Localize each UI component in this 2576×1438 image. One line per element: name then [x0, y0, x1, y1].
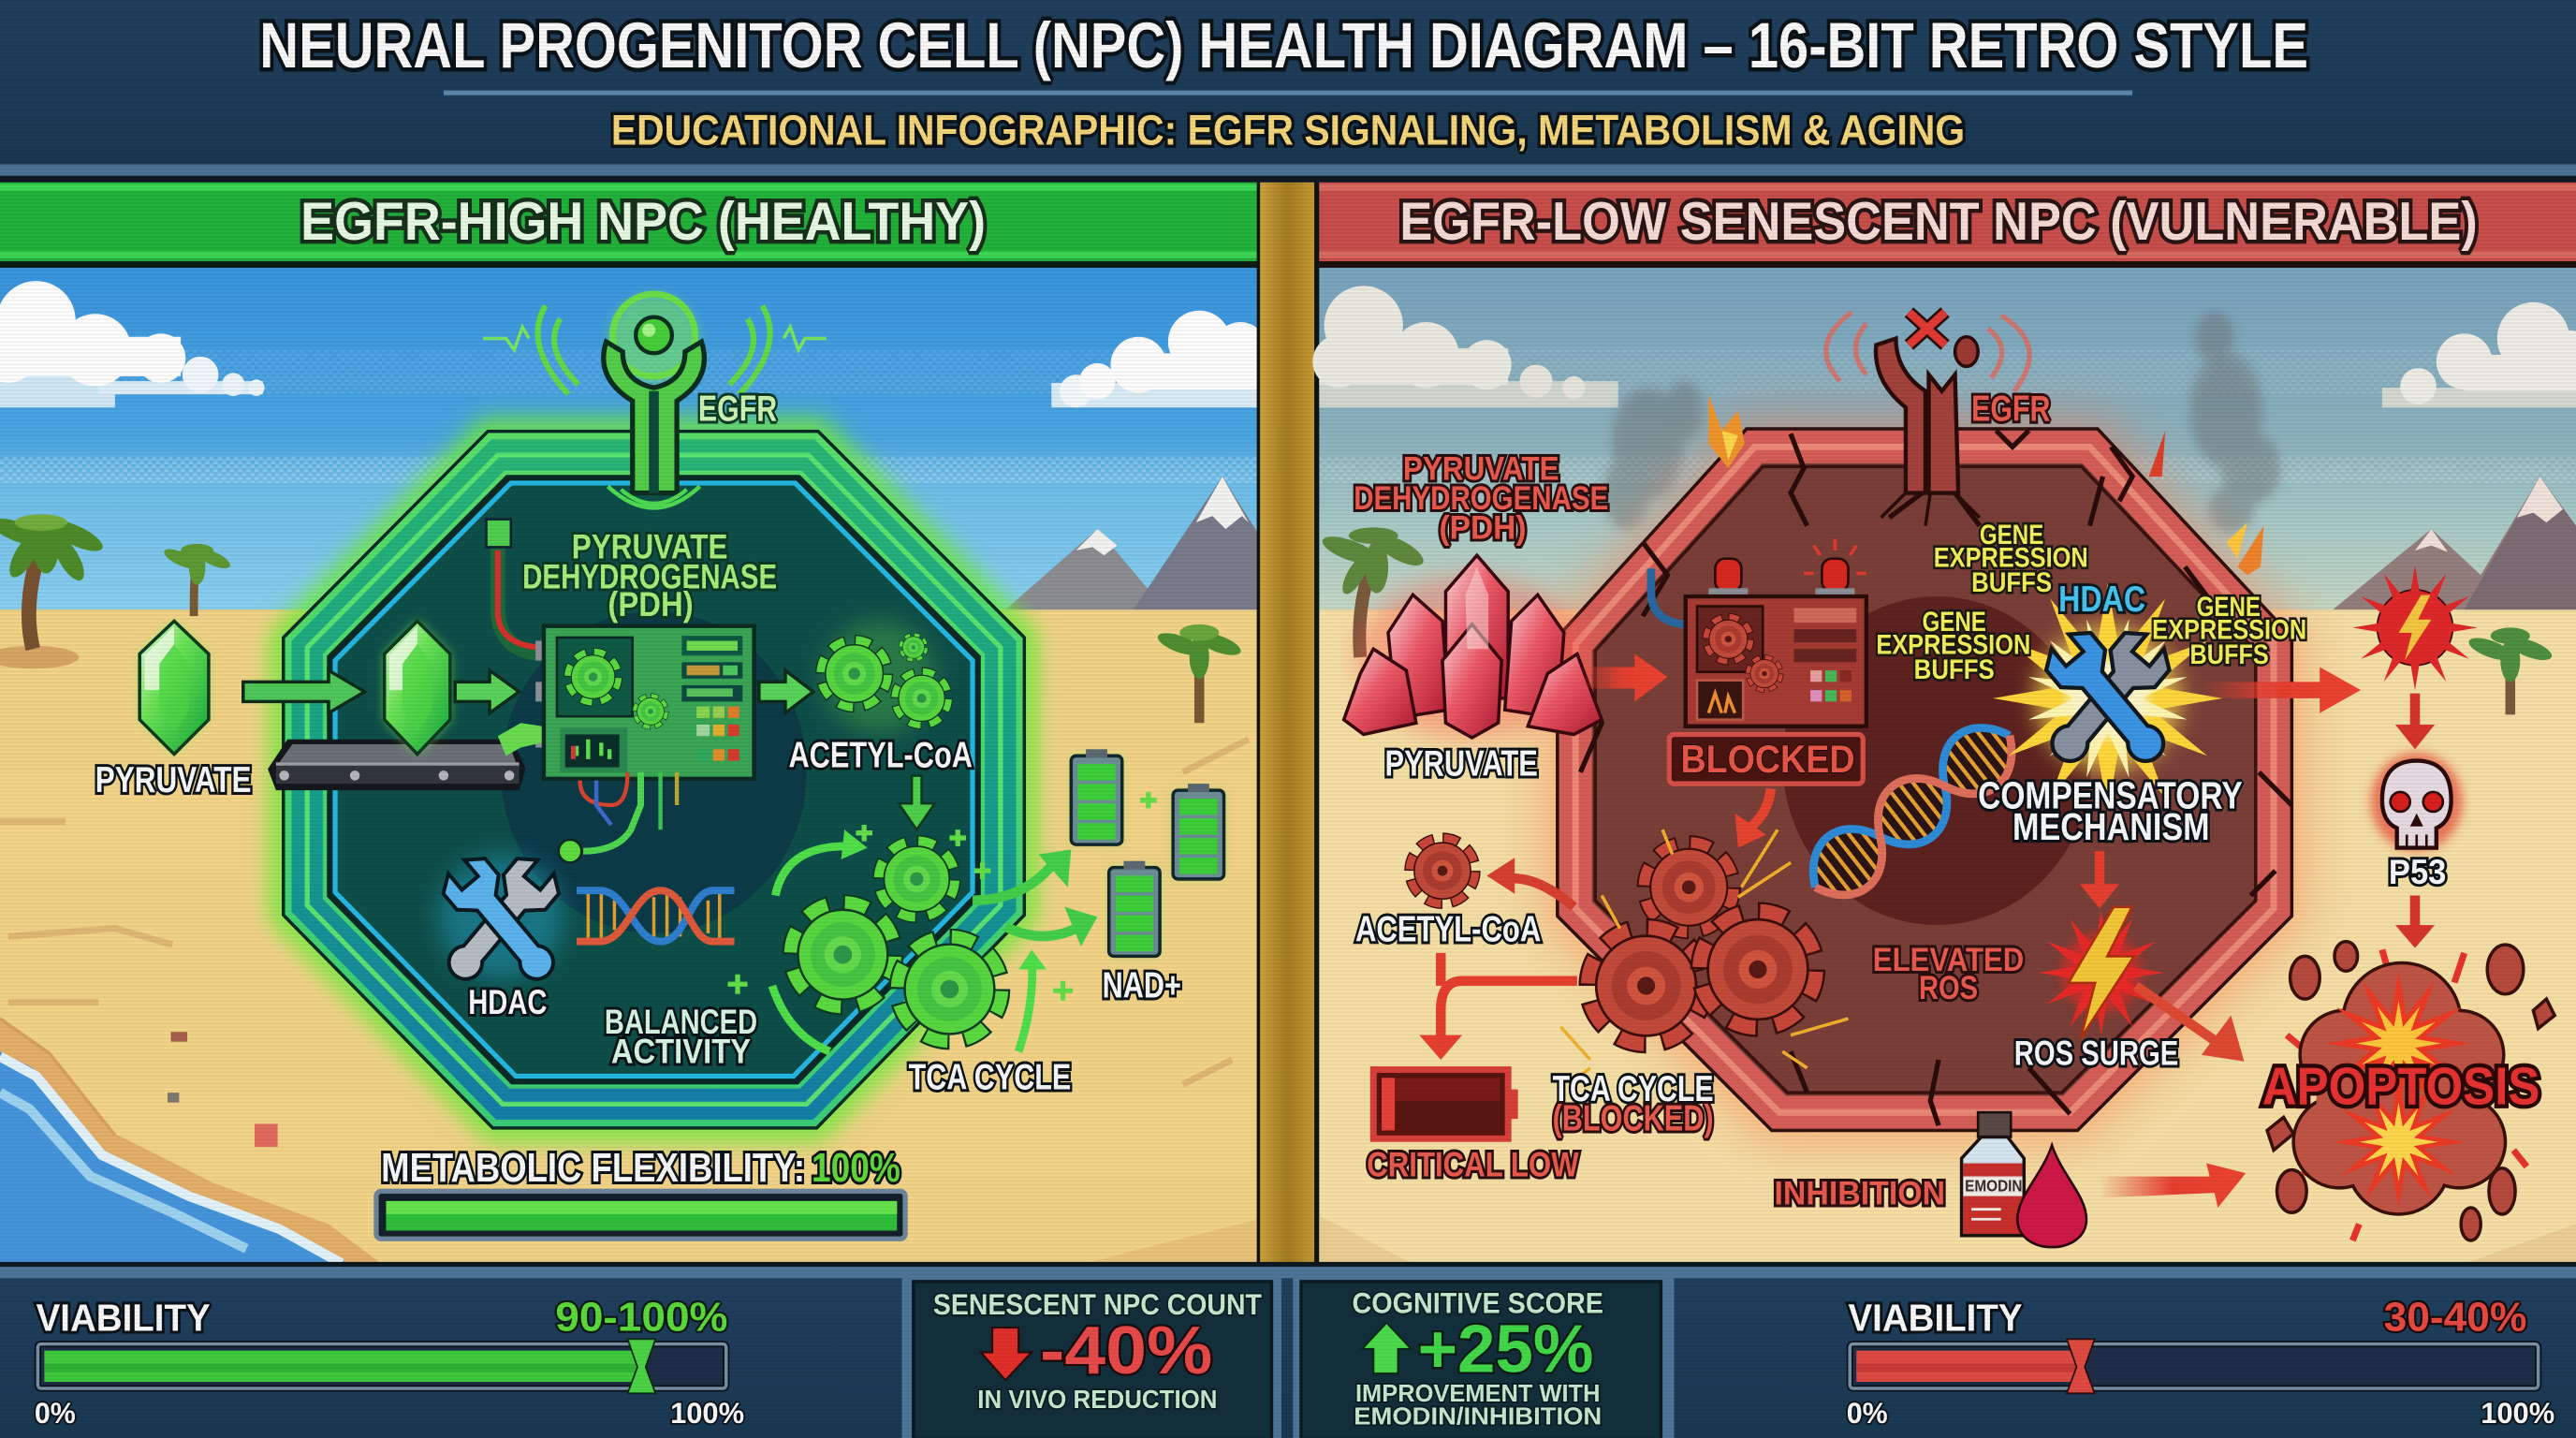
icon: TCA cycle gears	[728, 792, 1157, 1051]
header bar	[0, 0, 2576, 183]
clouds	[0, 281, 1266, 407]
viability gauge healthy	[35, 1295, 744, 1430]
icon: broken TCA gears	[1560, 829, 1848, 1084]
arrow into PDH	[455, 670, 520, 713]
icon: ROS surge bolt	[2039, 907, 2163, 1038]
arrow out of cell	[2202, 668, 2361, 713]
viability gauge healthy: 90-100%	[555, 1295, 728, 1341]
arrow to PDH	[1580, 654, 1667, 701]
viability gauge healthy: VIABILITY	[37, 1297, 211, 1340]
conveyor belt	[268, 740, 526, 790]
viability gauge vulnerable: 100%	[2481, 1396, 2554, 1430]
label: gene expression buffs top: BUFFS	[1971, 567, 2052, 598]
label: gene expression buffs top	[1934, 520, 2088, 598]
label: inhibition: INHIBITION	[1775, 1175, 1945, 1211]
label: compensatory mechanism	[1978, 773, 2243, 848]
label: gene expression buffs top: GENE	[1980, 520, 2043, 550]
healthy cell membrane	[283, 431, 1025, 1129]
label: pyruvate: PYRUVATE	[95, 760, 252, 800]
stat: senescent NPC count: SENESCENT NPC COUNT	[933, 1287, 1262, 1321]
smoke plumes	[1603, 311, 2280, 533]
EGFR receptor broken	[1826, 312, 2029, 526]
label: balanced activity: ACTIVITY	[611, 1033, 751, 1071]
icon: blood drop	[2017, 1145, 2086, 1247]
label: gene expression buffs right: GENE	[2197, 592, 2261, 623]
stat: cognitive score: +25%	[1418, 1312, 1593, 1387]
stat: senescent NPC count: IN VIVO REDUCTION	[977, 1385, 1218, 1414]
stat: cognitive score: COGNITIVE SCORE	[1352, 1285, 1603, 1319]
icon: HDAC wrench healthy	[434, 849, 568, 992]
label: gene expression buffs right	[2152, 592, 2306, 670]
wire to machine	[498, 526, 542, 654]
viability gauge vulnerable: VIABILITY	[1848, 1297, 2023, 1340]
icon: green up arrow	[1362, 1323, 1412, 1373]
icon: DNA helix healthy	[577, 890, 735, 942]
left panel heading	[0, 183, 1258, 268]
label: pyruvate dehydrogenase: (PDH)	[607, 585, 694, 624]
label: elevated ROS	[1873, 942, 2024, 1006]
label: pyruvate dehydrogenase failing	[1354, 450, 1608, 547]
stat: senescent NPC count: -40%	[1040, 1313, 1212, 1388]
label: pyruvate dehydrogenase	[522, 528, 777, 624]
icon: apoptosis explosion	[2267, 942, 2554, 1240]
icon: red down arrow	[981, 1328, 1032, 1380]
arrow to acetyl-CoA	[759, 670, 813, 713]
label: balanced activity	[605, 1003, 757, 1071]
label: elevated ROS: ELEVATED	[1873, 942, 2024, 978]
icon: DNA helix strained	[1795, 711, 2029, 913]
label: ROS surge: ROS SURGE	[2014, 1034, 2178, 1072]
icon: red starburst	[2352, 565, 2478, 690]
label: gene expression buffs left: GENE	[1922, 607, 1986, 638]
wire core	[498, 550, 539, 647]
bottom stats bar	[0, 1262, 2576, 1438]
icon: acetyl-CoA small gear	[1411, 840, 1474, 902]
curved arrows to NAD	[973, 849, 1097, 946]
arrow to apoptosis	[2136, 986, 2244, 1062]
cables below machine	[559, 772, 677, 862]
arrow down to p53	[2395, 694, 2435, 749]
icon: pyruvate crystal outside	[139, 621, 209, 755]
arrow into cell	[243, 670, 365, 713]
label: TCA cycle blocked: (BLOCKED)	[1553, 1098, 1714, 1138]
label: NAD+: NAD+	[1103, 965, 1181, 1005]
wasteland background	[1319, 268, 2576, 1264]
stat: cognitive score: EMODIN/INHIBITION	[1354, 1402, 1602, 1431]
arrow to explosion	[2100, 1164, 2246, 1208]
label: acetyl-CoA: ACETYL-CoA	[1355, 910, 1541, 950]
mountains dim	[2333, 477, 2576, 609]
damaged cell membrane	[1559, 431, 2291, 1129]
label: elevated ROS: ROS	[1919, 970, 1978, 1006]
stat: cognitive score: IMPROVEMENT WITH	[1355, 1379, 1600, 1407]
label: TCA cycle: TCA CYCLE	[909, 1058, 1071, 1098]
icon: emodin bottle: EMODIN	[1965, 1176, 2023, 1195]
label: balanced activity: BALANCED	[605, 1003, 757, 1041]
label: TCA cycle blocked: TCA CYCLE	[1553, 1069, 1714, 1109]
metabolic flexibility gauge: 100%	[812, 1145, 900, 1191]
icon: skull	[2371, 753, 2463, 851]
divider	[1257, 183, 1319, 1264]
beach background	[0, 268, 1258, 1264]
right panel: EGFR-low senescent scene	[1312, 183, 2576, 1264]
icon: pyruvate crystal inside	[385, 621, 450, 755]
clouds dim	[1312, 286, 2576, 407]
metabolic flexibility gauge	[376, 1145, 905, 1239]
left panel: EGFR-high healthy scene	[0, 183, 1266, 1264]
icon: emodin bottle	[1962, 1112, 2024, 1236]
stat: cognitive score	[1293, 1277, 1674, 1438]
split arrow to battery	[1419, 953, 1577, 1060]
label: gene expression buffs right: BUFFS	[2190, 639, 2269, 670]
label: pyruvate dehydrogenase: DEHYDROGENASE	[522, 557, 777, 595]
label: acetyl-CoA: ACETYL-CoA	[788, 736, 973, 776]
palm trees dim	[1319, 527, 2554, 714]
blocked label: BLOCKED	[1680, 737, 1855, 781]
arrow down to gears	[1734, 788, 1771, 848]
PDH machine	[498, 626, 754, 779]
viability gauge healthy: 100%	[670, 1396, 744, 1430]
right panel heading: EGFR-LOW SENESCENT NPC (VULNERABLE)	[1399, 192, 2478, 252]
label: gene expression buffs left	[1876, 607, 2030, 685]
icon: acetyl-CoA gears	[822, 621, 947, 733]
label: pyruvate: PYRUVATE	[1385, 743, 1538, 784]
fires	[1708, 394, 2264, 575]
palm trees	[0, 513, 1243, 723]
label: HDAC: HDAC	[2058, 580, 2145, 620]
viability gauge vulnerable: 30-40%	[2384, 1295, 2526, 1341]
label: P53: P53	[2389, 853, 2446, 891]
EGFR receptor healthy	[483, 294, 827, 507]
icon: NAD+ batteries	[1071, 749, 1224, 956]
connector	[487, 520, 511, 547]
label: gene expression buffs left: BUFFS	[1914, 654, 1995, 685]
label: apoptosis: APOPTOSIS	[2262, 1056, 2539, 1115]
label: EGFR: EGFR	[698, 389, 777, 429]
label: pyruvate dehydrogenase failing: DEHYDROGENASE	[1354, 480, 1608, 517]
arrow down to apoptosis	[2395, 895, 2435, 948]
label: compensatory mechanism: COMPENSATORY	[1978, 773, 2243, 816]
icon: critically low battery	[1373, 1070, 1518, 1138]
right panel heading	[1319, 183, 2576, 268]
icon: red crystal cluster	[1344, 555, 1602, 740]
label: EGFR: EGFR	[1971, 389, 2050, 429]
mountains	[1005, 477, 1258, 609]
label: compensatory mechanism: MECHANISM	[2012, 805, 2210, 848]
label: pyruvate dehydrogenase failing: (PDH)	[1439, 510, 1526, 547]
label: critical low: CRITICAL LOW	[1367, 1146, 1579, 1184]
label: gene expression buffs top: EXPRESSION	[1934, 542, 2088, 573]
icon: HDAC wrench with sparks	[1993, 583, 2223, 814]
stat: senescent NPC count	[902, 1277, 1281, 1438]
viability gauge vulnerable: 0%	[1847, 1396, 1888, 1430]
arrow to ROS	[2080, 851, 2119, 909]
subtitle: EDUCATIONAL INFOGRAPHIC: EGFR SIGNALING, METABOLISM & AGING	[611, 106, 1965, 154]
viability gauge vulnerable	[1847, 1295, 2554, 1430]
curved arrow to acetyl-CoA	[1486, 858, 1573, 907]
label: TCA cycle blocked	[1553, 1069, 1714, 1138]
left panel heading: EGFR-HIGH NPC (HEALTHY)	[300, 192, 986, 252]
label: gene expression buffs left: EXPRESSION	[1876, 630, 2030, 661]
arrow down to TCA	[899, 775, 935, 829]
label: pyruvate dehydrogenase: PYRUVATE	[572, 528, 728, 566]
label: gene expression buffs right: EXPRESSION	[2152, 615, 2306, 646]
PDH machine with sirens	[1651, 539, 1866, 726]
viability gauge healthy: 0%	[35, 1396, 76, 1430]
metabolic flexibility gauge: METABOLIC FLEXIBILITY:	[381, 1145, 805, 1191]
label: pyruvate dehydrogenase failing: PYRUVATE	[1403, 450, 1559, 487]
label: HDAC: HDAC	[468, 983, 547, 1021]
